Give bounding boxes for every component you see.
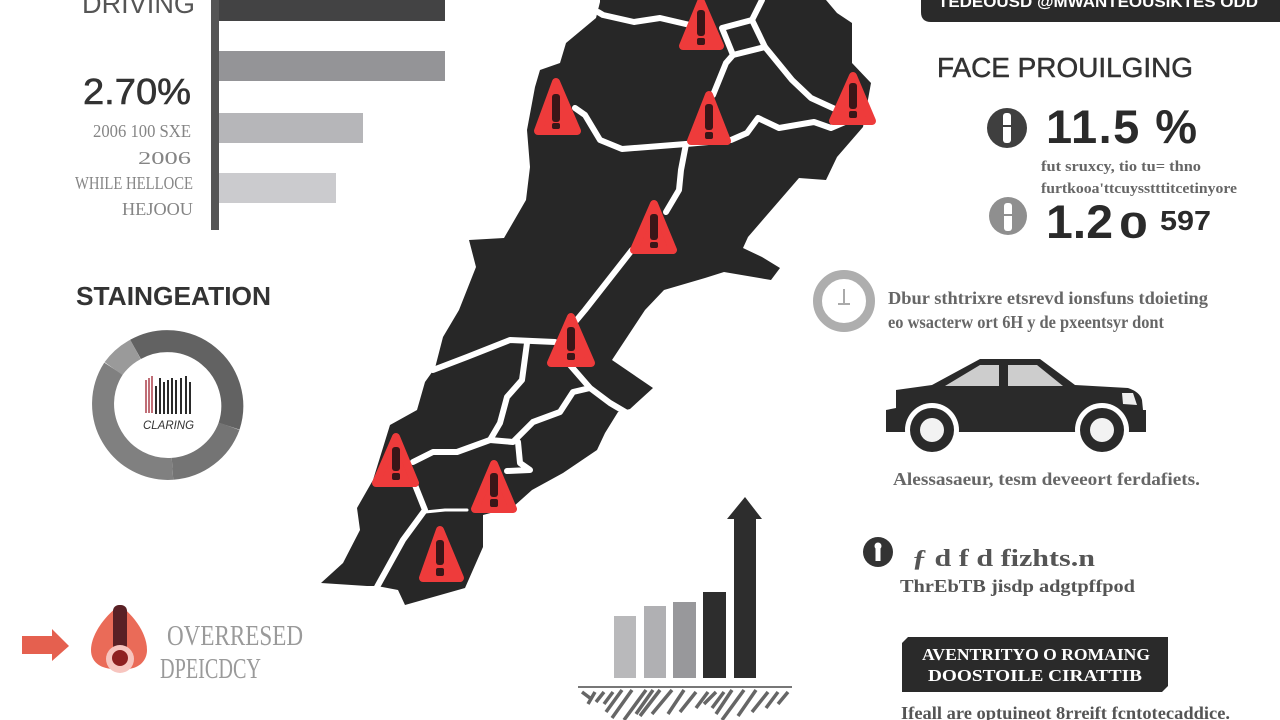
hatched caption (582, 690, 788, 720)
icon: car (886, 359, 1146, 462)
text block: statistic caption: WHILE HELLOCE (75, 173, 193, 193)
hazard triangle 3 (691, 95, 727, 141)
text block: statistic caption: fut sruxcy, tio tu= thno (1041, 159, 1201, 175)
panel: rising bar chart (578, 497, 792, 720)
bar 4 (219, 173, 336, 203)
bar 2 (644, 606, 666, 678)
bar 2 (219, 51, 445, 81)
hazard triangle 5 (634, 204, 673, 250)
bar 3 (673, 602, 696, 678)
map: road network with hazards (321, 0, 872, 605)
panel: bottom-left warning (22, 605, 303, 685)
hazard triangle 2 (538, 82, 577, 131)
text block: car caption: Alessasaeur, tesm deveeort ferdafiets. (893, 469, 1200, 489)
text block: statistic caption: furtkooa'ttcuysstttitcetinyore (1041, 181, 1237, 197)
panel: right column header (921, 0, 1280, 83)
icon: barcode chart (143, 376, 194, 432)
text block: info note (900, 546, 1135, 596)
panel: info note (863, 537, 1135, 596)
icon: barcode chart: CLARING (143, 418, 194, 432)
hazard triangle 1 (683, 2, 720, 46)
text block: clock note: eo wsacterw ort 6H y de pxeentsyr dont (888, 312, 1164, 332)
chart axis (211, 0, 219, 230)
text block: warning label: DPEICDCY (160, 653, 261, 685)
heading: face profiling: FACE PROUILGING (937, 52, 1193, 83)
icon: red thermometer leaf (91, 605, 147, 673)
heading: stagnation: STAINGEATION (76, 281, 271, 311)
callout box (902, 637, 1168, 692)
text block: info note: ƒ d f d fizhts.n (912, 546, 1095, 572)
text block: statistic caption: HEJOOU (122, 199, 193, 219)
bar 3 (219, 113, 363, 143)
hazard triangle 7 (376, 437, 415, 483)
bar 1 (614, 616, 636, 678)
icon: gray info circle (989, 197, 1027, 235)
statistic: 1.2 figure: 0 (1119, 205, 1148, 246)
hazard triangle 4 (833, 76, 872, 121)
arrow: rising trend (727, 497, 762, 678)
banner (921, 0, 1280, 22)
text block: statistic caption (1041, 159, 1237, 197)
roads (377, 0, 845, 587)
icon: info circle (863, 537, 893, 567)
statistic: 11.5 percent: 11.5 % (1046, 100, 1197, 153)
text block: statistic caption: 2006 100 SXE (93, 121, 191, 141)
statistic: 1.2 figure: 1.2 (1046, 195, 1113, 248)
statistic: 1.2 figure: 597 (1160, 205, 1211, 236)
callout text (922, 645, 1150, 685)
panel: car (886, 359, 1200, 489)
text block: warning label (160, 620, 303, 685)
panel: driving bar chart (75, 0, 445, 230)
statistic: 1.2 figure (1046, 195, 1211, 248)
text block: warning label: OVERRESED (167, 620, 303, 652)
panel: dark callout (901, 637, 1230, 720)
hazard triangle 9 (423, 530, 460, 578)
text block: clock note (888, 288, 1208, 332)
icon: dark info circle (987, 108, 1027, 148)
panel: donut section (76, 281, 271, 469)
baseline (578, 686, 792, 688)
text block: statistic caption (75, 121, 193, 219)
hazard triangle 6 (551, 317, 591, 363)
donut chart (103, 341, 232, 469)
text block: statistic caption: 2006 (138, 148, 191, 168)
callout text: AVENTRITYO O ROMAING (922, 645, 1150, 664)
bar 1 (219, 0, 445, 21)
map silhouette (321, 0, 871, 605)
bar 4 (703, 592, 726, 678)
panel: statistics (987, 100, 1237, 248)
panel: clock note (818, 274, 1208, 332)
hazard triangle 8 (475, 464, 513, 509)
statistic: percentage: 2.70% (83, 71, 191, 112)
text block: info note: ThrEbTB jisdp adgtpffpod (900, 576, 1135, 596)
callout text: DOOSTOILE CIRATTIB (928, 666, 1142, 685)
text block: clock note: Dbur sthtrixre etsrevd ionsfuns tdoieting (888, 288, 1208, 308)
icon: clock (818, 274, 870, 328)
arrow: red pointer (22, 629, 69, 661)
